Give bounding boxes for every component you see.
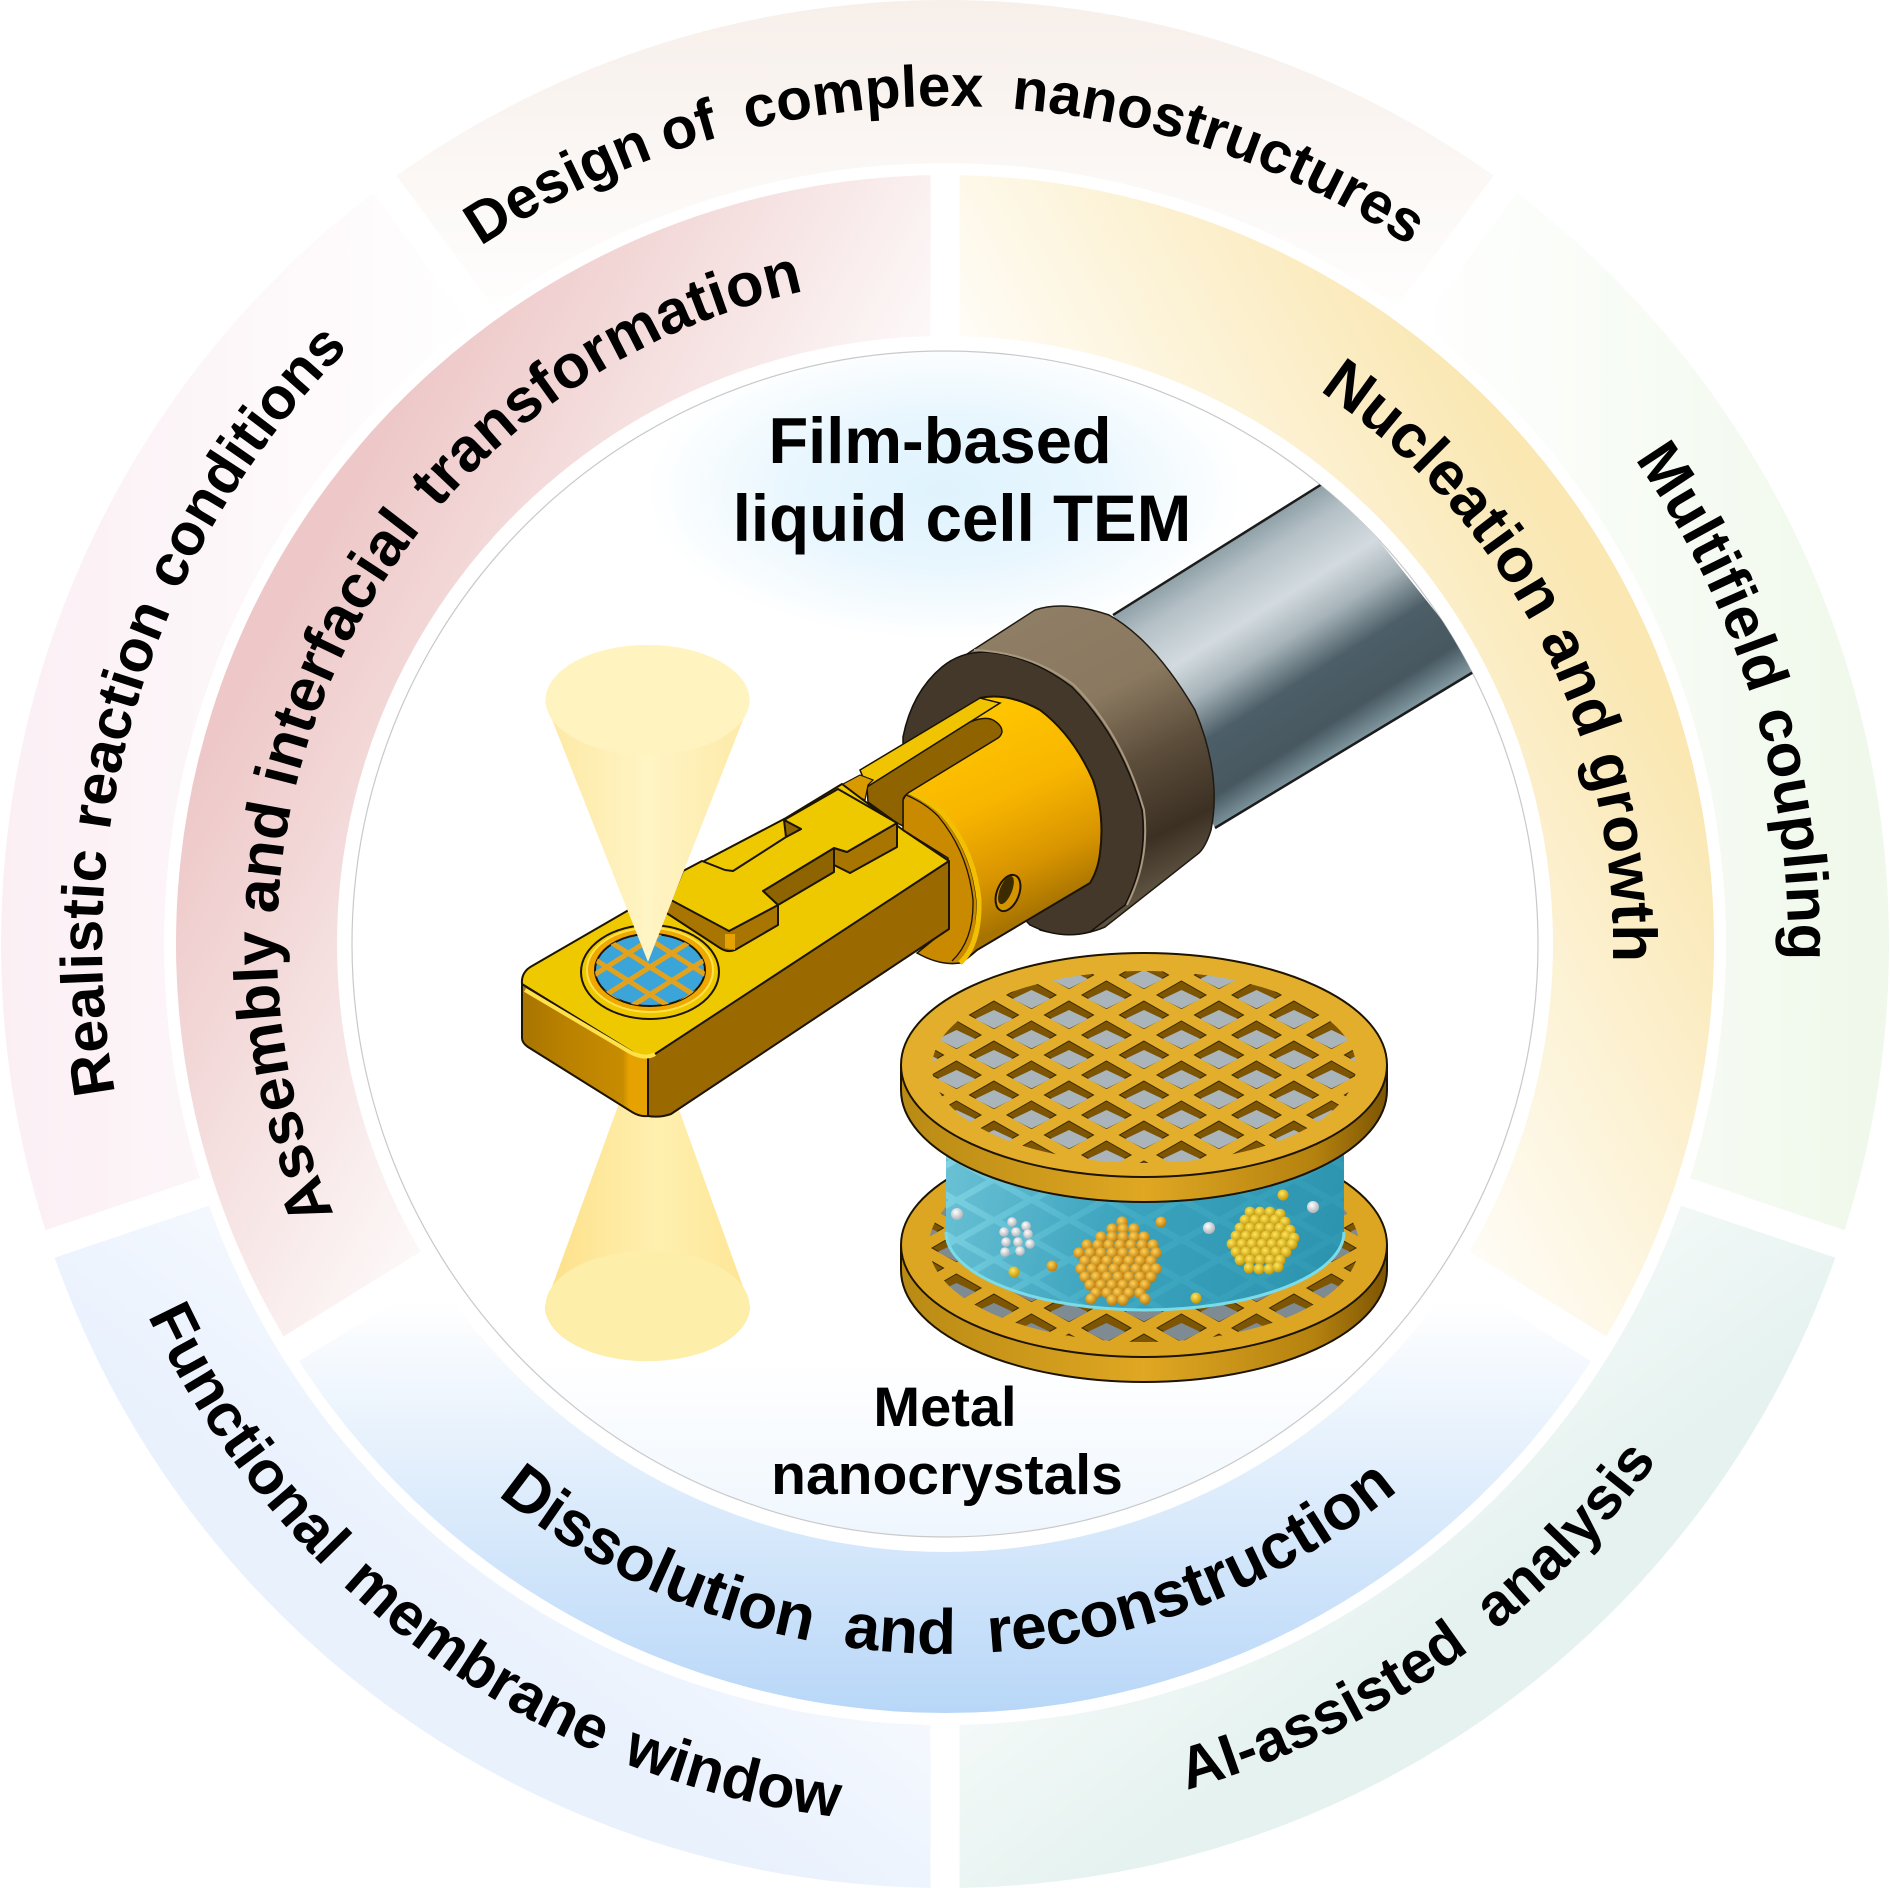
outer ring segment: design of complex nanostructures <box>385 0 1505 315</box>
outer ring segment: functional membrane window <box>50 1192 945 1888</box>
title: Film-based liquid cell TEM <box>733 404 1191 555</box>
label: Metal nanocrystals: nanocrystals <box>771 1443 1123 1507</box>
holder sample window with mini mesh grid <box>580 924 720 1020</box>
lower label glow <box>631 1445 1260 1536</box>
outer ring segment: AI-assisted analysis <box>945 1192 1840 1888</box>
label: Functional membrane window: Functional membrane window <box>149 1300 843 1816</box>
liquid cell: liquid layer <box>946 1150 1344 1310</box>
nanoparticle: yellow cluster <box>1227 1207 1299 1274</box>
central circle panel <box>631 366 1260 1536</box>
middle ring segment: assembly and interfacial transformation <box>176 175 945 1349</box>
barrel side hole <box>991 871 1025 915</box>
lower electron beam cone <box>545 1024 750 1361</box>
upper electron beam cone <box>545 645 750 962</box>
title: Film-based liquid cell TEM: liquid cell TEM <box>733 482 1191 555</box>
TEM holder rod <box>1113 479 1480 828</box>
middle ring segment: dissolution and reconstruction <box>291 1264 1599 1713</box>
outer ring segment: realistic reaction conditions <box>1 184 482 1244</box>
middle ring segment: nucleation and growth <box>945 175 1714 1349</box>
label: Multifield coupling: Multifield coupling <box>1637 440 1830 956</box>
gold holder barrel <box>843 696 1101 964</box>
label: Dissolution and reconstruction: Dissolution and reconstruction <box>500 1462 1396 1654</box>
holder collar <box>903 606 1214 935</box>
label: Metal nanocrystals: Metal <box>873 1375 1017 1438</box>
title: Film-based liquid cell TEM: Film-based <box>768 404 1112 477</box>
label: Design of complex nanostructures: Design of complex nanostructures <box>462 64 1420 244</box>
liquid cell: top mesh disc <box>901 953 1387 1202</box>
label: Assembly and interfacial transformation: Assembly and interfacial transformation <box>232 262 800 1214</box>
outer ring segment: multifield coupling <box>1408 184 1889 1244</box>
label: AI-assisted analysis: AI-assisted analysis <box>1188 1448 1652 1790</box>
nanoparticle: white atom cluster <box>999 1217 1035 1257</box>
free metal atoms in liquid <box>951 1190 1319 1304</box>
holder clamp <box>665 789 897 951</box>
holder tip body <box>522 784 949 1117</box>
label: Realistic reaction conditions: Realistic reaction conditions <box>59 332 344 1096</box>
nanoparticle: orange pentagon decahedron <box>1073 1216 1162 1306</box>
title glow <box>698 366 1192 614</box>
liquid cell: bottom mesh disc <box>901 1133 1387 1382</box>
label: Metal nanocrystals <box>771 1375 1123 1507</box>
label: Nucleation and growth: Nucleation and growth <box>1322 358 1658 958</box>
